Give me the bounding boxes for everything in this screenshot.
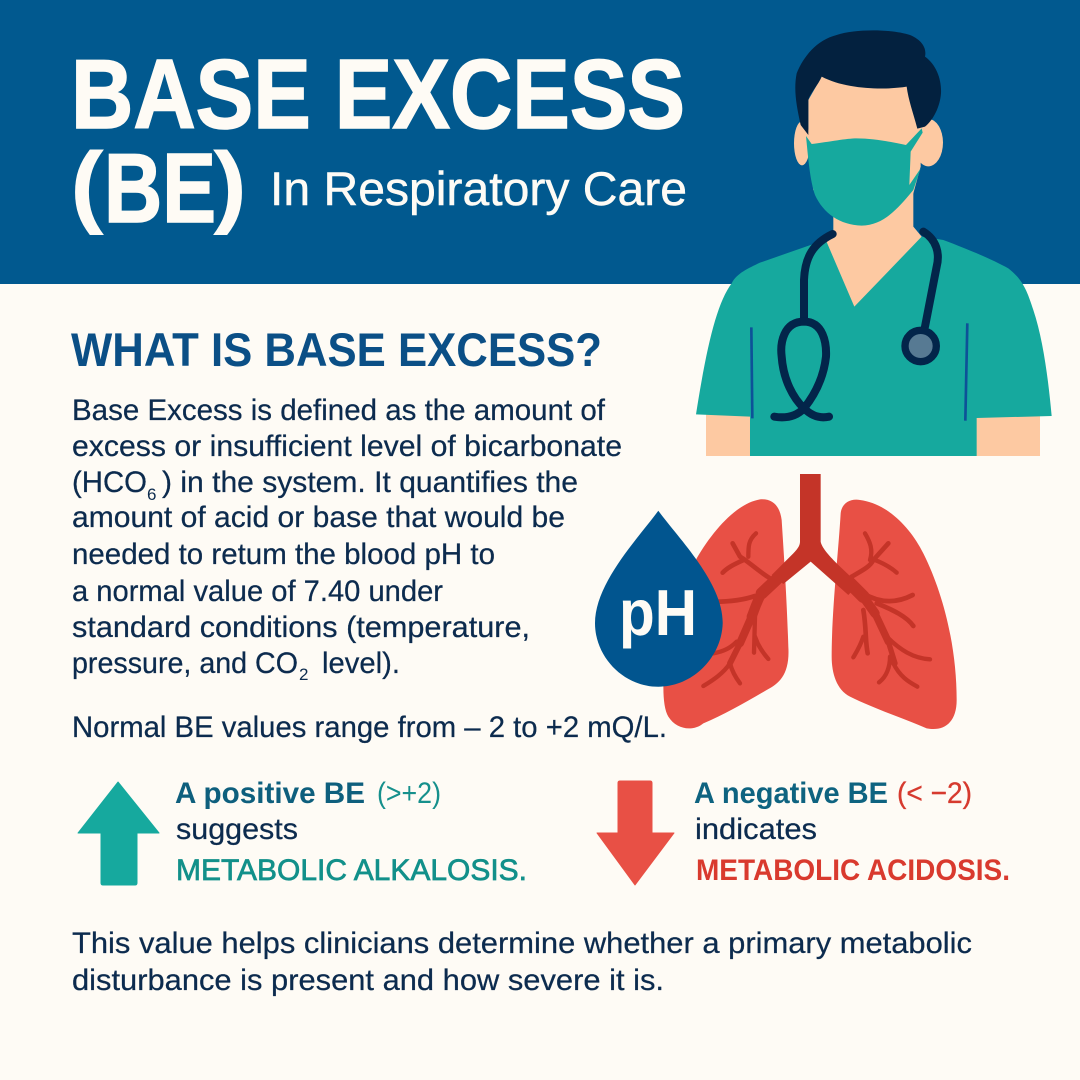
callout: negative BE: indicates [695, 813, 817, 846]
definition text block: (HCO [72, 466, 147, 499]
callout: positive BE: (>+2) [377, 777, 441, 810]
definition text block: 6 [147, 485, 156, 504]
trachea [772, 474, 858, 595]
callout: positive BE: METABOLIC ALKALOSIS. [176, 854, 527, 887]
right lung [832, 500, 957, 729]
title [70, 39, 687, 243]
icon: pH drop: pH [619, 576, 697, 649]
bronchi [703, 533, 930, 687]
definition text block: ) in the system. It quantifies the [162, 466, 578, 499]
definition text block: standard conditions (temperature, [72, 611, 530, 644]
scrubs [696, 237, 1052, 456]
illustration: clinician with mask and stethoscope [696, 30, 1052, 456]
icon: down arrow [597, 781, 674, 885]
definition text block: 2 [299, 665, 308, 684]
title: BASE EXCESS [71, 39, 685, 149]
definition text block: pressure, and CO [72, 647, 298, 680]
face [808, 77, 921, 217]
definition text block: level). [322, 647, 400, 680]
title: BE [104, 133, 216, 243]
definition text block: a normal value of 7.40 under [72, 575, 443, 608]
title: In Respiratory Care [270, 162, 687, 215]
left lung [663, 499, 789, 728]
title: ) [213, 134, 247, 236]
header banner [0, 0, 1080, 284]
icon: up arrow [78, 782, 159, 885]
closing text block: disturbance is present and how severe it is. [72, 964, 664, 997]
callout: positive BE [175, 777, 527, 887]
face mask [806, 128, 923, 226]
callout: negative BE: METABOLIC ACIDOSIS. [696, 854, 1010, 887]
closing text block: This value helps clinicians determine whether a primary metabolic [72, 927, 972, 960]
arms [706, 410, 1040, 456]
stethoscope [774, 232, 938, 417]
closing text block [72, 927, 972, 997]
definition text block: excess or insufficient level of bicarbonate [72, 430, 622, 463]
heading: what is base excess: WHAT IS BASE EXCESS? [71, 323, 602, 376]
normal range text: Normal BE values range from – 2 to +2 mQ/L. [72, 711, 667, 744]
illustration: lungs [663, 474, 957, 729]
callout: negative BE [694, 777, 1010, 887]
callout: negative BE: A negative BE [694, 777, 888, 810]
callout: positive BE: suggests [176, 813, 298, 846]
pocket seams [751, 323, 967, 421]
definition text block [72, 394, 622, 684]
definition text block: needed to retum the blood pH to [72, 538, 495, 571]
callout: negative BE: (< −2) [897, 777, 972, 810]
definition text block: Base Excess is defined as the amount of [72, 394, 606, 427]
ears [794, 119, 943, 166]
neck [827, 187, 922, 307]
title: ( [70, 134, 104, 236]
definition text block: amount of acid or base that would be [72, 501, 565, 534]
icon: pH drop [595, 511, 723, 687]
callout: positive BE: A positive BE [175, 777, 365, 810]
hair [795, 30, 941, 135]
